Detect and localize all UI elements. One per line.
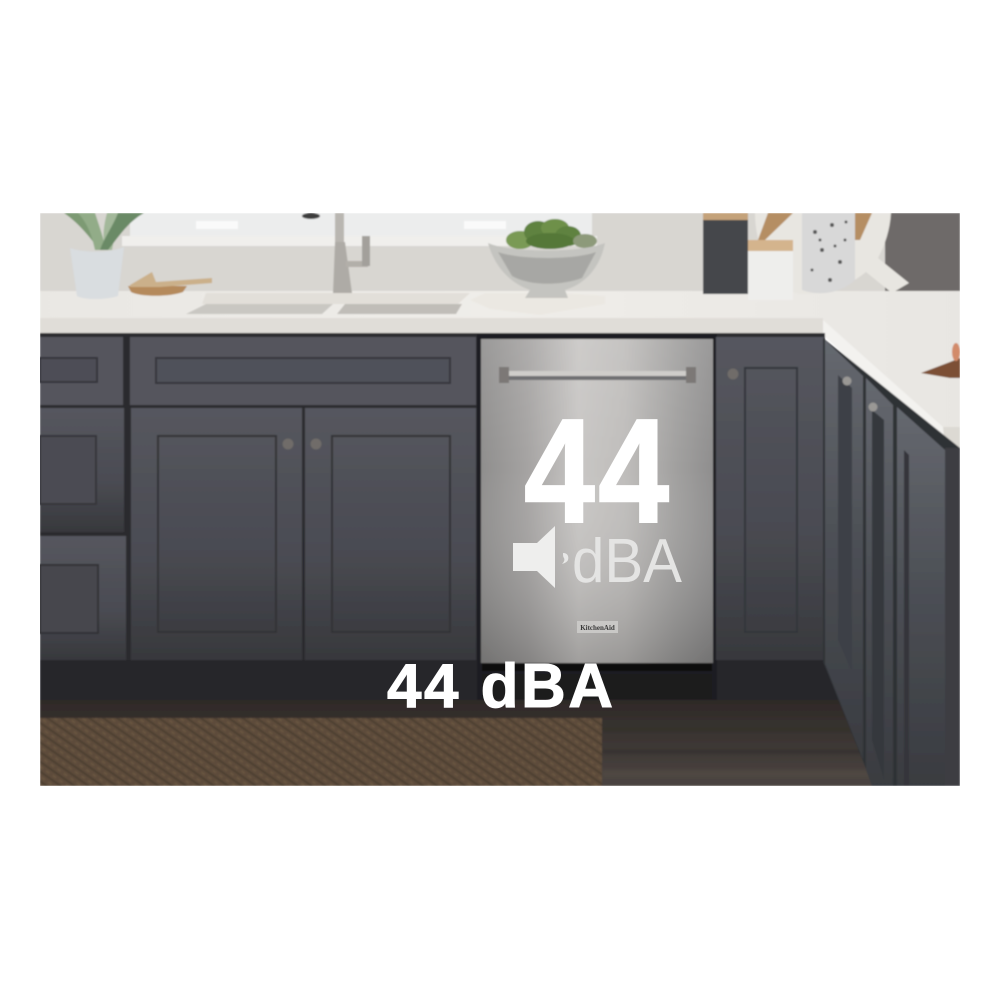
rug: [40, 718, 602, 786]
dark wall corner: [885, 213, 960, 291]
brand badge: [577, 621, 618, 633]
faucet: [333, 213, 370, 293]
sink: [186, 293, 470, 314]
kitchen photo: [40, 213, 960, 786]
cutting boards: [755, 213, 909, 294]
brand badge: KitchenAid: [580, 624, 615, 632]
main drawer: [130, 337, 476, 405]
dBA label on door: dBA: [572, 527, 683, 596]
floor: [40, 700, 880, 786]
cabinet frame: [40, 332, 826, 662]
window: [122, 213, 597, 246]
toe kick: [824, 666, 839, 702]
corner door: [716, 337, 824, 660]
caption: 44 dBA: [387, 652, 613, 721]
dishwasher: [477, 334, 717, 702]
towel: [470, 293, 605, 315]
wooden tray with brush: [128, 272, 212, 296]
canisters: [703, 213, 793, 300]
dishwasher handle: [499, 367, 696, 383]
left door: [131, 408, 302, 660]
plant: [64, 213, 144, 299]
infographic: kitchen scene with dishwasher noise rating: [40, 213, 960, 786]
right door: [305, 408, 476, 660]
strainer bowl of greens: [488, 219, 605, 298]
wall: [40, 213, 886, 292]
countertop: [40, 291, 960, 450]
speaker icon: [513, 526, 568, 588]
big number 44: 44: [524, 389, 672, 554]
cutting board with food: [921, 343, 960, 378]
side cabinets: [823, 338, 960, 786]
drawers left: [40, 337, 126, 660]
